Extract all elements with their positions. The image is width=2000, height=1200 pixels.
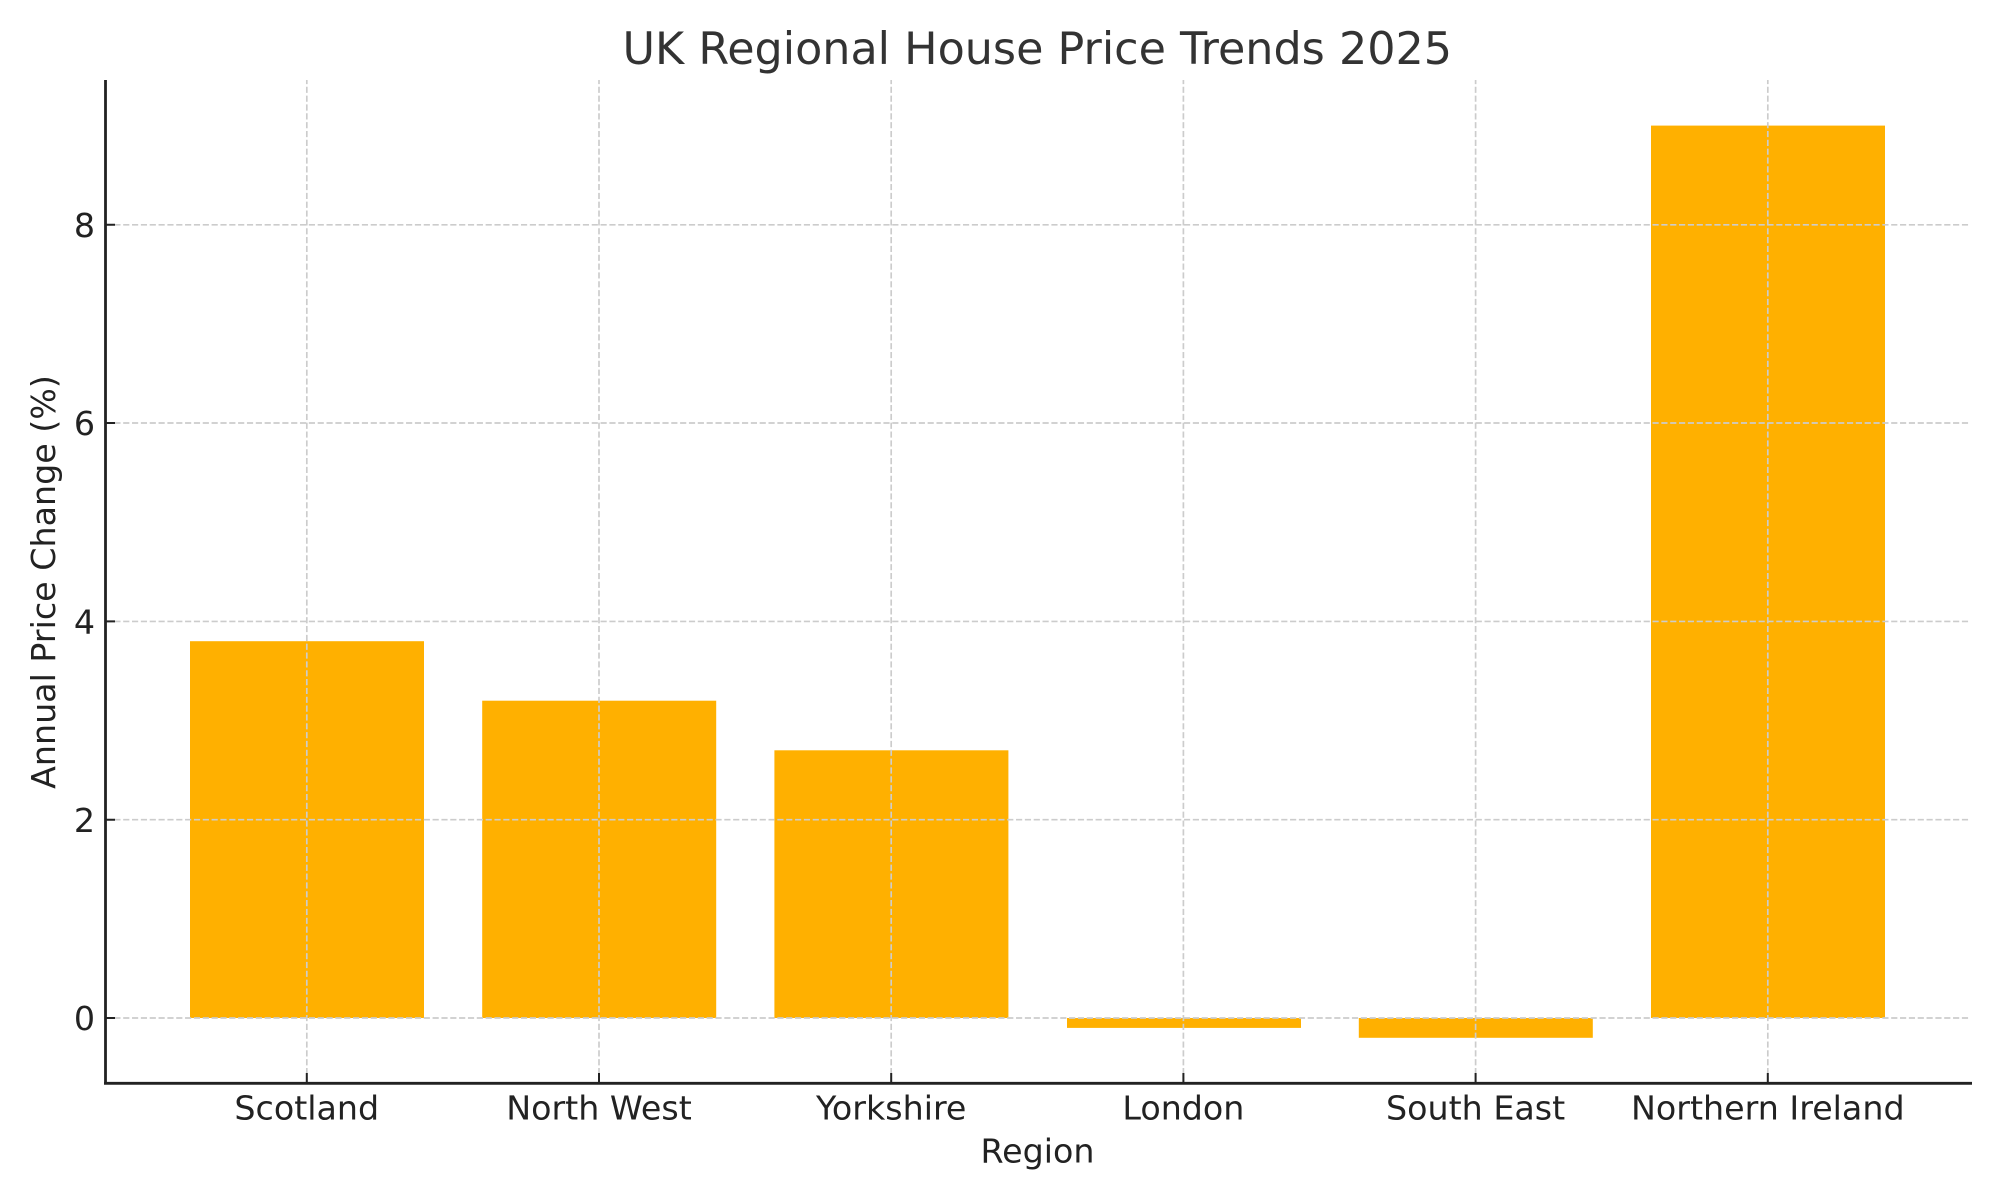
bar: Scotland 3.8 bbox=[190, 641, 424, 1018]
y axis label: Annual Price Change (%) bbox=[24, 375, 63, 789]
x axis tick labels: North West bbox=[506, 1088, 692, 1128]
title: UK Regional House Price Trends 2025 bbox=[623, 24, 1452, 75]
bar: North West 3.2 bbox=[482, 701, 716, 1018]
grid lines bbox=[106, 80, 1970, 1083]
x axis tick labels bbox=[234, 1088, 1905, 1128]
x axis label: Region bbox=[980, 1132, 1094, 1171]
x axis tick labels: Yorkshire bbox=[815, 1088, 966, 1128]
y axis tick labels: 6 bbox=[74, 404, 95, 443]
y axis tick labels: 0 bbox=[74, 999, 95, 1038]
y axis tick labels: 4 bbox=[74, 602, 95, 642]
bar: Northern Ireland 9.0 bbox=[1651, 126, 1885, 1018]
y axis tick labels: 2 bbox=[74, 801, 95, 840]
y axis tick labels bbox=[74, 206, 95, 1038]
x axis tick labels: South East bbox=[1386, 1088, 1565, 1128]
axes spines and ticks bbox=[104, 80, 1972, 1085]
x axis tick labels: Scotland bbox=[234, 1088, 379, 1128]
x axis tick labels: Northern Ireland bbox=[1631, 1088, 1905, 1128]
bar: London -0.1 bbox=[1067, 1018, 1301, 1028]
x axis tick labels: London bbox=[1122, 1088, 1244, 1128]
bars bbox=[190, 126, 1885, 1038]
bar: Yorkshire 2.7 bbox=[774, 750, 1008, 1018]
y axis tick labels: 8 bbox=[74, 206, 95, 245]
bar: South East -0.2 bbox=[1359, 1018, 1593, 1038]
